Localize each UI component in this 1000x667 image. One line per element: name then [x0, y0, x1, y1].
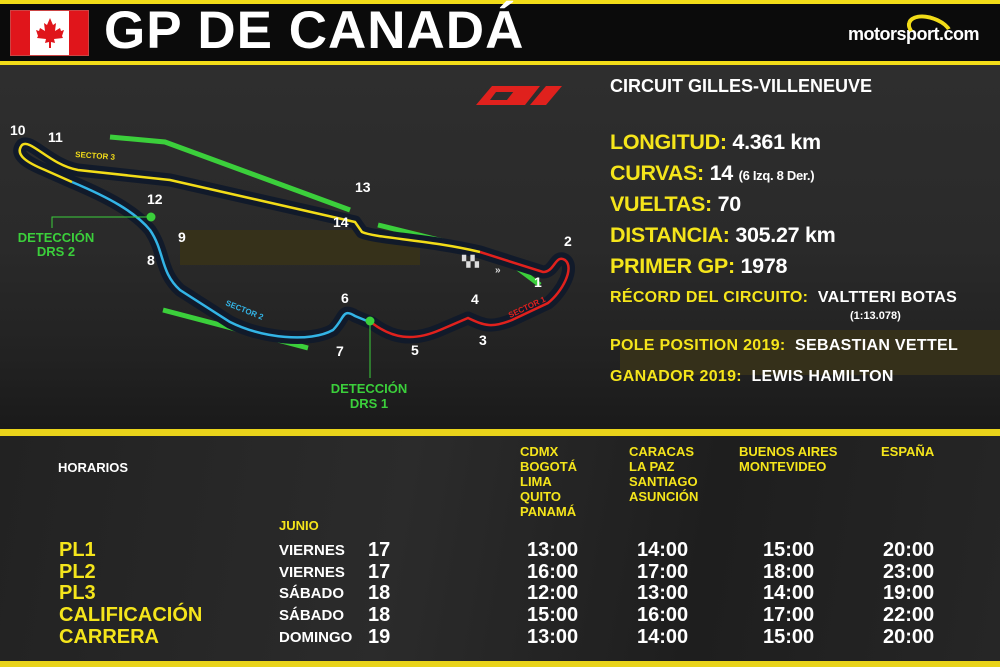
text: 17	[368, 561, 390, 583]
text: 17:00	[763, 604, 814, 626]
sector 1 red	[372, 252, 569, 337]
text: 18:00	[763, 561, 814, 583]
column headers	[520, 444, 577, 519]
circuit map: DRS 1	[350, 396, 388, 411]
text: 15:00	[527, 604, 578, 626]
text: 16:00	[637, 604, 688, 626]
corner numbers: 14	[333, 214, 349, 230]
text: PL2	[59, 561, 96, 583]
DRS detection points	[52, 213, 374, 378]
icon: start flag: ▚▚	[461, 254, 479, 268]
schedule rows: 14:00	[637, 539, 688, 561]
panel: schedule: ESPAÑA	[881, 444, 934, 459]
text: (1:13.078)	[850, 310, 901, 322]
text: 18	[368, 582, 390, 604]
panel: schedule: MONTEVIDEO	[739, 459, 826, 474]
panel: schedule: CARACAS	[629, 444, 694, 459]
corner numbers: 5	[411, 342, 419, 358]
column headers: CDMX	[520, 444, 558, 459]
text: 16:00	[527, 561, 578, 583]
text: PL3	[59, 582, 96, 604]
corner numbers: 11	[48, 129, 63, 145]
schedule rows: 15:00	[763, 539, 814, 561]
text: 15:00	[763, 626, 814, 648]
schedule rows: VIERNES	[279, 542, 345, 559]
column headers: PANAMÁ	[520, 504, 576, 519]
text: 14:00	[637, 626, 688, 648]
corner numbers	[10, 122, 572, 359]
text: 19:00	[883, 582, 934, 604]
sector 3 yellow	[20, 144, 480, 252]
corner numbers: 12	[147, 191, 163, 207]
text: 18	[368, 604, 390, 626]
text: 17:00	[637, 561, 688, 583]
text: POLE POSITION 2019: SEBASTIAN VETTEL	[610, 337, 958, 354]
text: 12:00	[527, 582, 578, 604]
corner numbers: 6	[341, 290, 349, 306]
divider band	[0, 429, 1000, 436]
text: 13:00	[527, 626, 578, 648]
panel: schedule: JUNIO	[279, 518, 319, 533]
text: 20:00	[883, 626, 934, 648]
schedule rows: 20:00	[883, 539, 934, 561]
text: PRIMER GP: 1978	[610, 254, 787, 278]
header bar	[0, 0, 1000, 65]
circuit map: DRS 2	[37, 244, 75, 259]
text: DISTANCIA: 305.27 km	[610, 223, 835, 247]
panel: schedule: SANTIAGO	[629, 474, 698, 489]
text: VUELTAS: 70	[610, 192, 741, 216]
text: CALIFICACIÓN	[59, 604, 202, 626]
panel: circuit stats	[610, 76, 958, 385]
schedule rows: 17	[368, 539, 390, 561]
text: DOMINGO	[279, 629, 352, 646]
circuit map: »	[495, 265, 501, 276]
text: GANADOR 2019: LEWIS HAMILTON	[610, 368, 894, 385]
text: VIERNES	[279, 564, 345, 581]
circuit map: DETECCIÓN	[331, 381, 407, 396]
text: RÉCORD DEL CIRCUITO: VALTTERI BOTAS	[610, 289, 957, 306]
column headers: QUITO	[520, 489, 561, 504]
text: SÁBADO	[279, 585, 344, 602]
circuit map	[10, 86, 575, 411]
text: SÁBADO	[279, 607, 344, 624]
circuit map: SECTOR 1	[507, 295, 547, 320]
panel: schedule: BUENOS AIRES	[739, 444, 837, 459]
corner numbers: 13	[355, 179, 371, 195]
schedule rows: 13:00	[527, 539, 578, 561]
corner numbers: 7	[336, 343, 344, 359]
panel: schedule: LA PAZ	[629, 459, 674, 474]
sector labels: SECTOR 3	[75, 150, 116, 162]
track outline	[20, 144, 569, 337]
text: 14:00	[763, 582, 814, 604]
schedule rows: PL1	[59, 539, 96, 561]
text: 19	[368, 626, 390, 648]
schedule rows	[59, 539, 934, 561]
column headers: BOGOTÁ	[520, 459, 577, 474]
green DRS zones	[110, 137, 540, 348]
corner numbers: 1	[534, 274, 542, 290]
text: CARRERA	[59, 626, 159, 648]
panel: schedule: HORARIOS	[58, 460, 128, 475]
text: LONGITUD: 4.361 km	[610, 130, 821, 154]
bottom band	[0, 661, 1000, 667]
circuit map: DETECCIÓN	[18, 230, 94, 245]
text: 22:00	[883, 604, 934, 626]
icon: canada flag	[10, 10, 89, 56]
corner numbers: 9	[178, 229, 186, 245]
corner numbers: 3	[479, 332, 487, 348]
title: GP DE CANADÁ	[104, 1, 524, 60]
logo: motorsport.com	[848, 14, 979, 44]
circuit name: CIRCUIT GILLES-VILLENEUVE	[610, 76, 872, 96]
panel: schedule: ASUNCIÓN	[629, 489, 698, 504]
text: 13:00	[637, 582, 688, 604]
panel: circuit background	[0, 65, 1000, 429]
panel: schedule	[0, 436, 1000, 662]
corner numbers: 10	[10, 122, 26, 138]
corner numbers: 2	[564, 233, 572, 249]
text: 23:00	[883, 561, 934, 583]
corner numbers: 4	[471, 291, 479, 307]
logo: motorsport.com: motorsport.com	[848, 24, 979, 44]
corner numbers: 8	[147, 252, 155, 268]
text: CURVAS: 14 (6 Izq. 8 Der.)	[610, 161, 814, 185]
sector 2 blue	[72, 182, 372, 337]
circuit map: SECTOR 2	[224, 299, 265, 322]
icon: F1 logo	[476, 86, 562, 105]
column headers: LIMA	[520, 474, 552, 489]
